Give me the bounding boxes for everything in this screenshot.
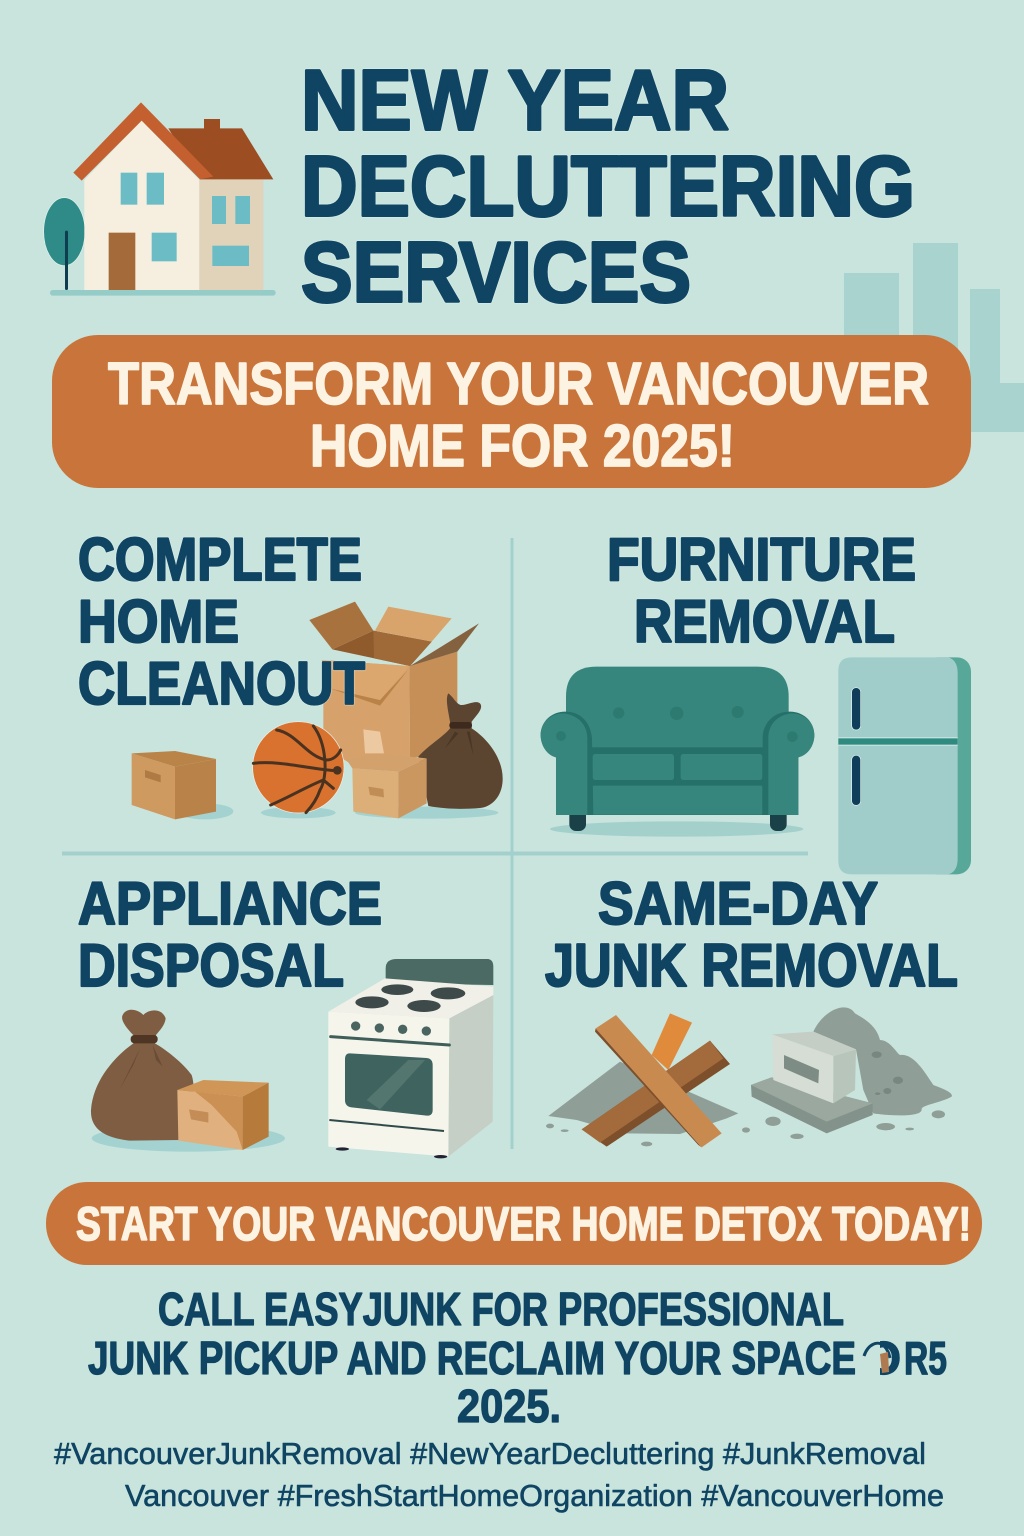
title: [301, 54, 915, 320]
icon: boxes, basketball and bag: [132, 602, 503, 819]
heading: same-day junk removal: SAME-DAY: [598, 870, 878, 937]
banner: transform your home: HOME FOR 2025!: [310, 413, 735, 479]
title: SERVICES: [301, 226, 691, 320]
heading: complete home cleanout: [78, 526, 365, 717]
footer message: R5: [904, 1332, 947, 1384]
heading: appliance disposal: DISPOSAL: [78, 932, 344, 999]
heading: complete home cleanout: CLEANOUT: [78, 650, 365, 717]
icon: house: [44, 102, 276, 296]
call-to-action banner: [46, 1182, 982, 1265]
title: NEW YEAR: [301, 54, 729, 148]
footer message: CALL EASYJUNK FOR PROFESSIONAL: [158, 1283, 844, 1335]
footer message: [88, 1283, 947, 1432]
footer message: O: [866, 1332, 901, 1384]
heading: same-day junk removal: JUNK REMOVAL: [545, 932, 958, 999]
icon: sofa: [541, 667, 814, 837]
icon: bag and box: [91, 1010, 285, 1152]
background skyline: [844, 243, 1024, 432]
footer message: 2025.: [457, 1380, 561, 1432]
heading: furniture removal: [607, 526, 916, 655]
hashtags: [54, 1436, 944, 1513]
panel dividers: [62, 538, 808, 1149]
heading: appliance disposal: [78, 870, 382, 999]
icon: refrigerator: [838, 657, 971, 874]
heading: complete home cleanout: COMPLETE: [78, 526, 362, 593]
heading: same-day junk removal: [545, 870, 958, 999]
banner: transform your home: [52, 335, 971, 488]
icon: stove: [328, 959, 493, 1158]
heading: furniture removal: REMOVAL: [634, 588, 895, 655]
footer message: JUNK PICKUP AND RECLAIM YOUR SPACE: [88, 1332, 856, 1384]
hashtags: Vancouver #FreshStartHomeOrganization #VancouverHome: [125, 1478, 944, 1513]
title: DECLUTTERING: [301, 140, 915, 234]
heading: furniture removal: FURNITURE: [607, 526, 916, 593]
glitch glyph: [860, 1340, 890, 1378]
heading: complete home cleanout: HOME: [78, 588, 239, 655]
hashtags: #VancouverJunkRemoval #NewYearDecluttering #JunkRemoval: [54, 1436, 926, 1471]
heading: appliance disposal: APPLIANCE: [78, 870, 382, 937]
icon: wood planks and rubble: [546, 1007, 952, 1147]
